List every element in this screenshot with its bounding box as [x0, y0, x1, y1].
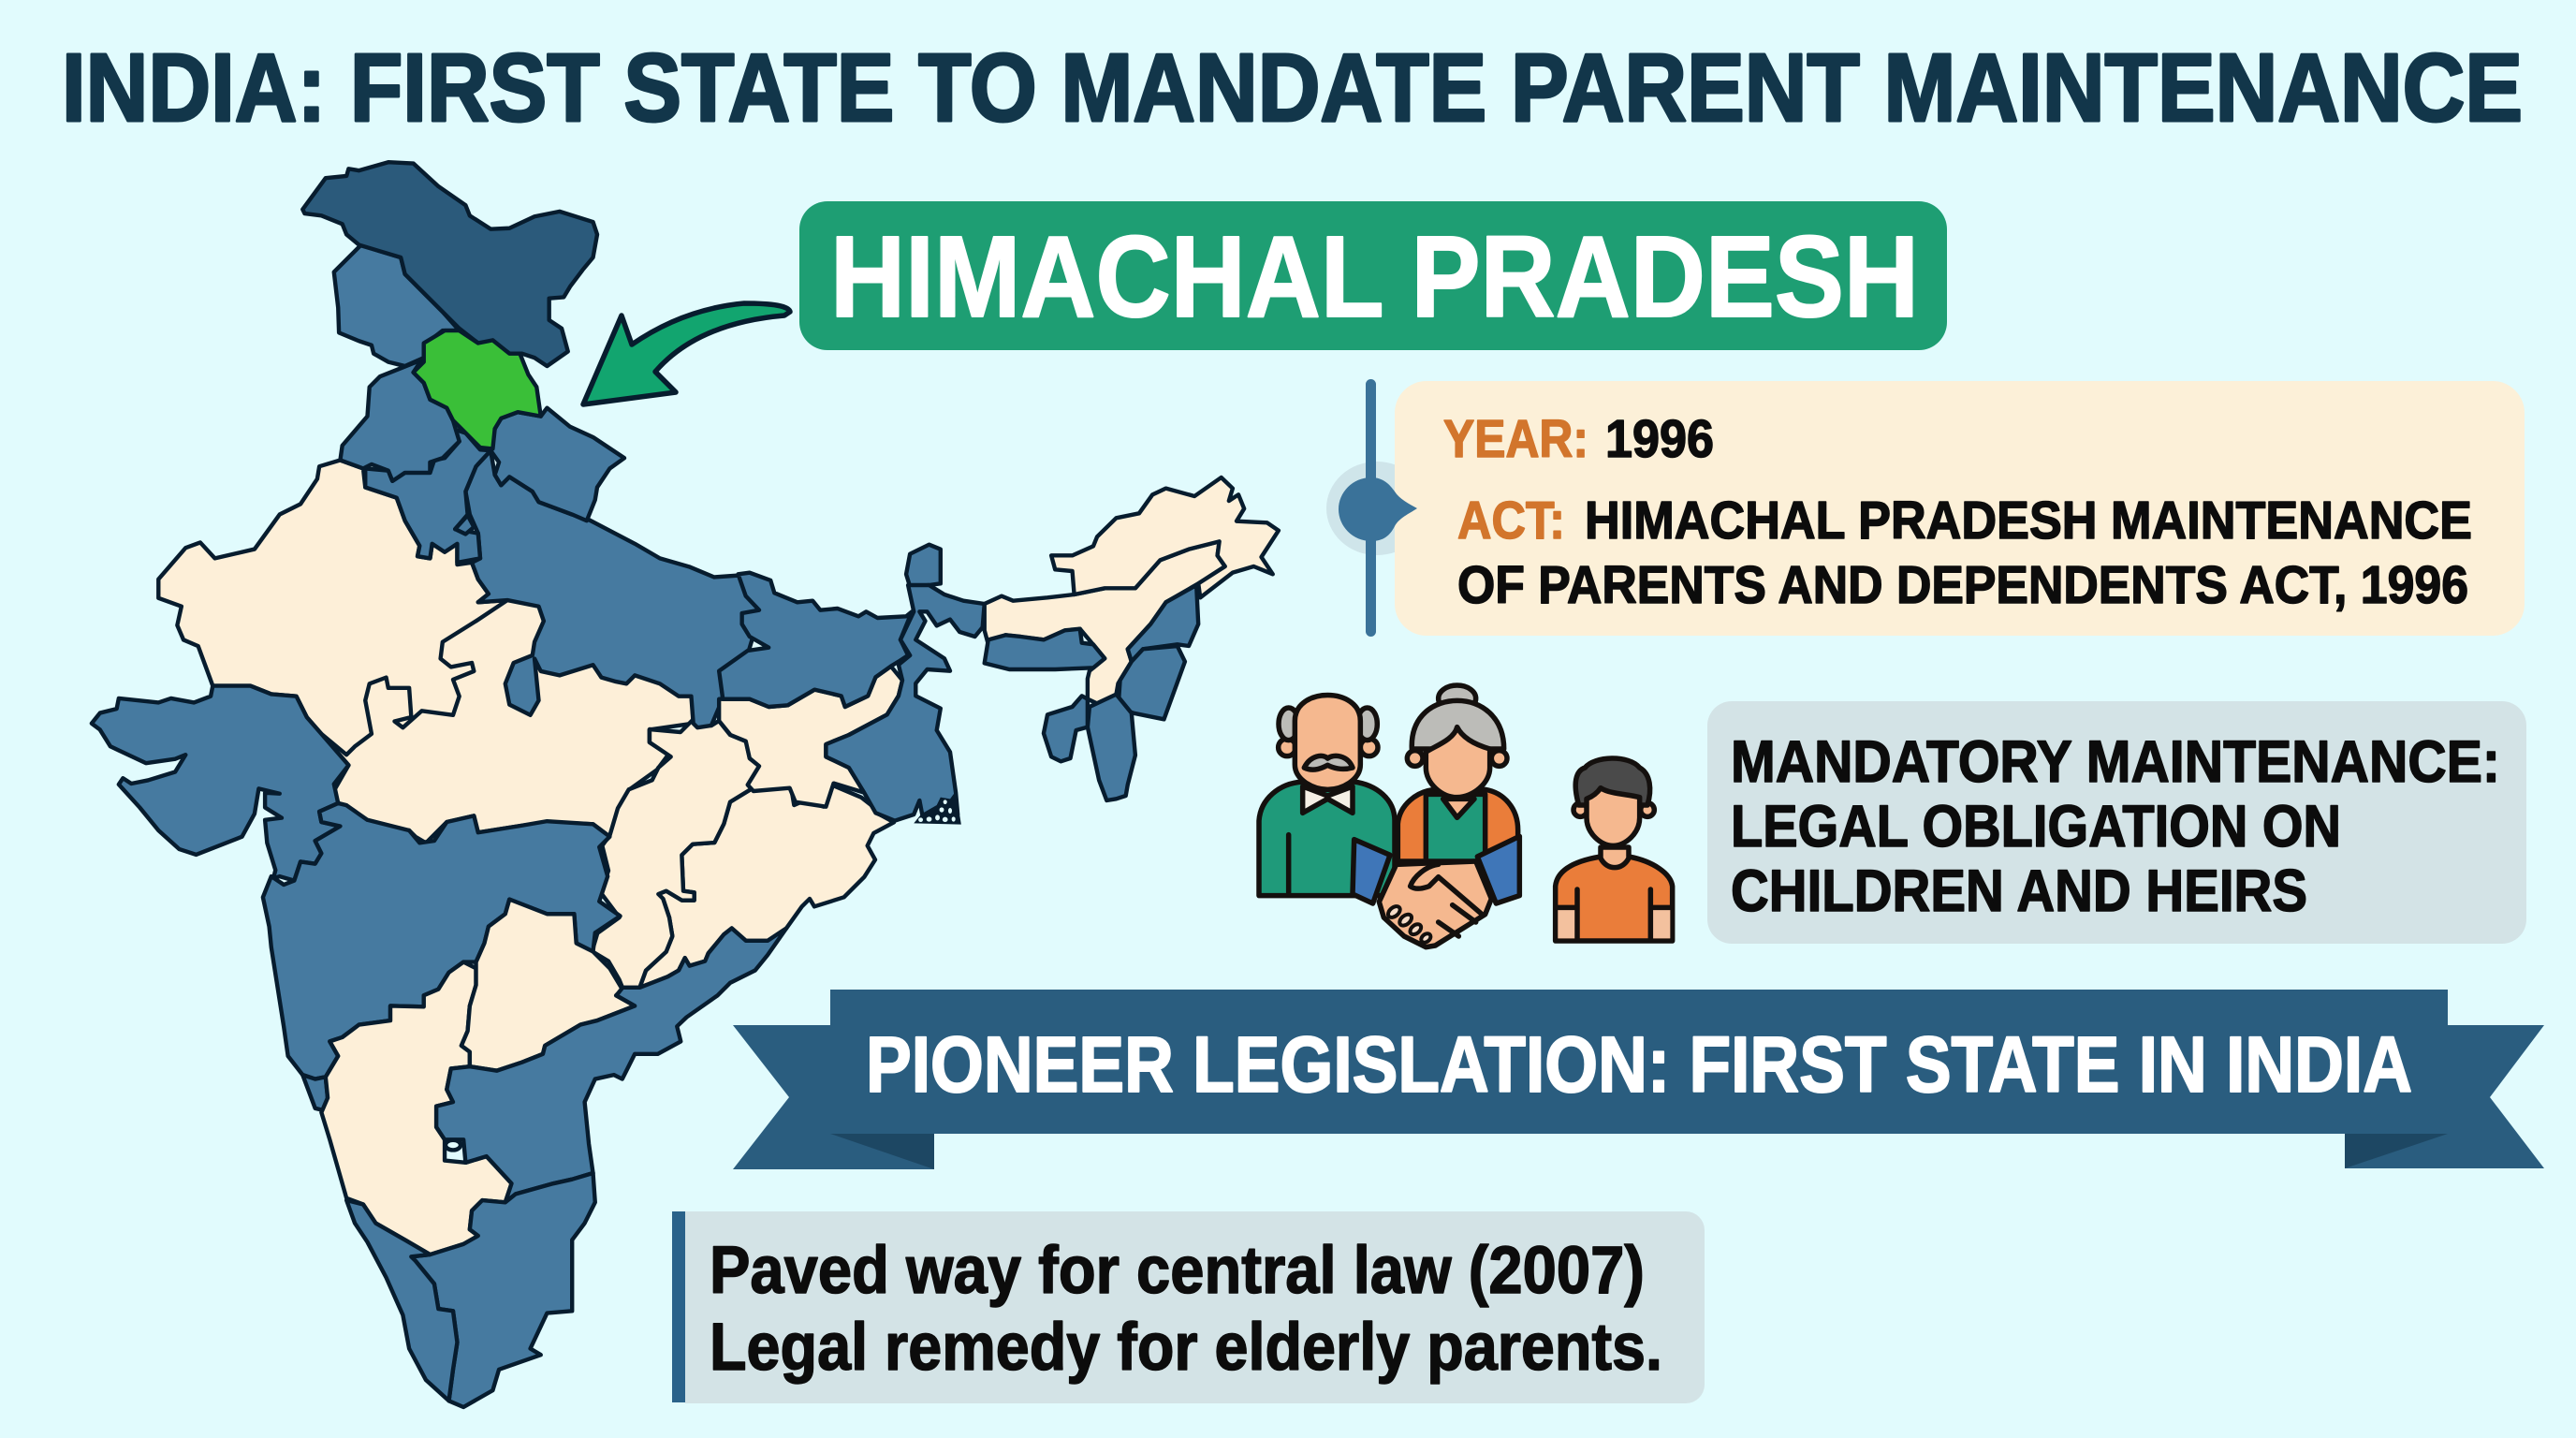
state: Andhra Pradesh — [436, 928, 786, 1202]
state: Assam — [985, 541, 1225, 705]
act name line 2: OF PARENTS AND DEPENDENTS ACT, 1996 — [1457, 555, 2468, 615]
state: Manipur — [1119, 646, 1185, 719]
state: Telangana — [461, 900, 635, 1071]
icon: family with handshake — [1259, 685, 1673, 947]
state: Tripura — [1044, 696, 1088, 761]
act label: ACT: — [1457, 491, 1565, 550]
Odisha and Chhattisgarh — [593, 719, 894, 988]
map of India — [92, 162, 1279, 1407]
state: Kerala — [346, 1200, 457, 1401]
state: Karnataka — [321, 962, 511, 1255]
timeline line — [1366, 379, 1376, 637]
state: Uttarakhand — [490, 408, 624, 521]
region: northern territory dark — [302, 162, 597, 366]
eastern and north-eastern states — [719, 477, 1279, 825]
act name line 1: HIMACHAL PRADESH MAINTENANCE — [1585, 491, 2472, 550]
highlighted state: Himachal Pradesh — [414, 330, 541, 448]
state: Punjab — [340, 360, 460, 481]
state: West Bengal — [826, 585, 985, 821]
state: Meghalaya — [985, 629, 1105, 669]
icon: grandfather — [1259, 695, 1395, 896]
central cream states: Madhya Pradesh, Rajasthan — [158, 460, 694, 843]
panel text line 1: MANDATORY MAINTENANCE: — [1731, 729, 2500, 795]
state: Sikkim — [906, 545, 941, 587]
state: Nagaland — [1128, 585, 1198, 662]
year value: 1996 — [1605, 409, 1714, 469]
state: Gujarat — [92, 686, 348, 881]
arrow pointing to Himachal Pradesh — [583, 303, 790, 404]
panel: mandatory maintenance — [1707, 701, 2526, 944]
timeline node — [1339, 477, 1417, 541]
panel background — [1395, 381, 2525, 636]
ribbon main band — [830, 990, 2448, 1134]
icon: child — [1556, 758, 1673, 941]
timeline panel: year and act — [1326, 379, 2525, 637]
ribbon banner: pioneer legislation — [733, 990, 2544, 1169]
icon: handshake — [1353, 836, 1519, 947]
state: Bihar — [719, 573, 912, 707]
state: Arunachal Pradesh — [1051, 477, 1279, 597]
state: Tamil Nadu — [411, 1173, 595, 1407]
panel text line 2: LEGAL OBLIGATION ON — [1731, 794, 2341, 859]
year label: YEAR: — [1443, 409, 1588, 469]
state: Goa — [302, 1075, 328, 1110]
timeline node halo — [1326, 462, 1427, 555]
Sundarbans delta — [914, 791, 961, 825]
southern states — [263, 803, 786, 1407]
state: Mizoram — [1088, 695, 1135, 800]
region: Kashmir valley — [334, 245, 460, 366]
northern states — [92, 162, 760, 881]
state: Haryana — [365, 429, 490, 563]
state: Uttar Pradesh — [465, 450, 760, 727]
state: Delhi — [455, 515, 474, 535]
state: Jharkhand — [719, 667, 902, 807]
state: Maharashtra — [263, 803, 621, 1079]
accent bar — [672, 1211, 685, 1402]
text line 1: Paved way for central law (2007) — [710, 1234, 1645, 1308]
icon: grandmother — [1398, 685, 1518, 861]
text line 2: Legal remedy for elderly parents. — [710, 1311, 1662, 1385]
ribbon left tail — [733, 1025, 934, 1169]
panel: central law impact — [672, 1211, 1705, 1403]
state name badge: HIMACHAL PRADESH — [830, 213, 1919, 342]
ribbon right tail — [2345, 1025, 2544, 1168]
panel text line 3: CHILDREN AND HEIRS — [1731, 858, 2307, 924]
